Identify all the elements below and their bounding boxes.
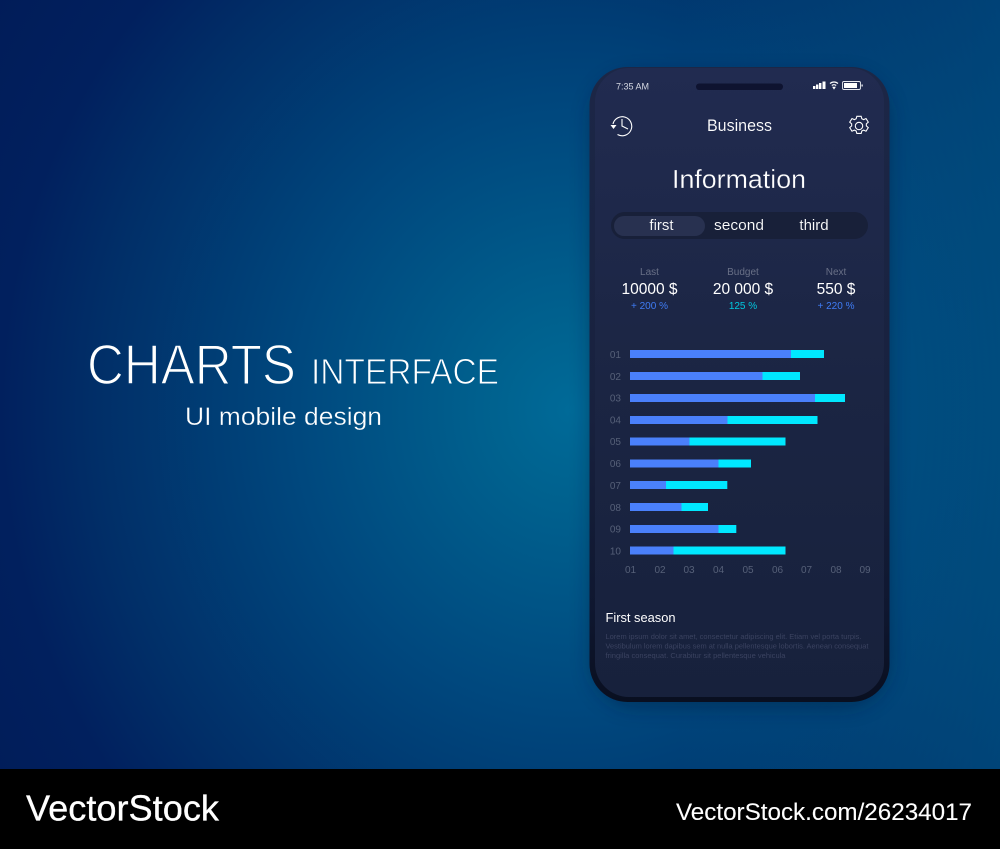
segmented tabs: second	[714, 217, 764, 234]
y axis labels: 10	[610, 546, 621, 558]
y axis labels: 02	[610, 372, 621, 383]
stat: budget: Budget	[727, 267, 759, 278]
phone	[590, 67, 890, 706]
stat: next: + 220 %	[818, 301, 855, 312]
y axis labels: 03	[610, 394, 621, 404]
y axis labels: 05	[610, 437, 621, 448]
watermark bar	[0, 769, 1000, 849]
phone shadow	[592, 76, 888, 706]
segmented tabs	[611, 212, 868, 239]
stat: budget: 20 000 $	[713, 281, 774, 298]
icon: signal	[813, 82, 826, 89]
y axis labels: 08	[610, 503, 621, 514]
status time: 7:35 AM	[616, 82, 649, 92]
stat: next: 550 $	[817, 281, 856, 298]
x axis labels: 05	[742, 565, 754, 576]
watermark logo: VectorStock	[26, 788, 220, 828]
x axis labels: 08	[830, 565, 842, 576]
x axis labels	[625, 565, 871, 576]
segmented tabs: third	[799, 217, 829, 234]
y axis labels: 06	[610, 459, 621, 470]
x axis labels: 03	[683, 565, 695, 576]
phone body	[590, 67, 890, 702]
bar chart	[610, 350, 871, 576]
header title: Business	[707, 116, 772, 135]
section heading: First season	[606, 611, 676, 625]
icon: wifi	[830, 82, 838, 88]
headline: CHARTS	[87, 333, 296, 397]
stat: last: 10000 $	[621, 281, 678, 298]
stat: budget	[713, 267, 774, 312]
stat: last: Last	[640, 267, 659, 278]
x axis labels: 01	[625, 565, 636, 576]
y axis labels: 07	[610, 481, 621, 492]
stat: last: + 200 %	[631, 301, 668, 312]
speaker notch	[696, 84, 783, 90]
phone screen	[595, 68, 884, 697]
stat: budget: 125 %	[729, 301, 757, 312]
y axis labels: 01	[610, 350, 621, 361]
segmented tabs: first	[649, 217, 674, 234]
body text	[606, 632, 869, 660]
body text: Vestibulum lorem dapibus sem at nulla pellentesque lobortis. Aenean consequat	[606, 642, 869, 650]
x axis labels: 06	[772, 565, 783, 576]
body text: fringilla consequat. Curabitur sit pellentesque vehicula	[606, 651, 786, 660]
page title: Information	[672, 164, 806, 194]
x axis labels: 04	[713, 565, 724, 576]
icon: settings gear	[850, 116, 868, 133]
headline	[87, 333, 499, 397]
headline: INTERFACE	[311, 351, 499, 392]
x axis labels: 09	[859, 565, 871, 576]
y axis labels: 09	[610, 524, 621, 536]
icon: battery	[842, 82, 863, 90]
stat: next	[817, 267, 856, 312]
x axis labels: 02	[654, 565, 666, 576]
stat: last	[621, 267, 678, 312]
x axis labels: 07	[801, 565, 812, 576]
stacked bars, blue segment	[630, 350, 815, 554]
y axis labels	[610, 350, 621, 558]
icon: history clock	[610, 117, 632, 136]
body text: Lorem ipsum dolor sit amet, consectetur adipiscing elit. Etiam vel porta turpis.	[606, 632, 862, 641]
y axis labels: 04	[610, 416, 621, 426]
stat: next: Next	[826, 267, 847, 278]
subtitle: UI mobile design	[185, 403, 382, 431]
watermark url: VectorStock.com/26234017	[676, 799, 972, 826]
stacked bars, cyan segment	[665, 350, 845, 554]
